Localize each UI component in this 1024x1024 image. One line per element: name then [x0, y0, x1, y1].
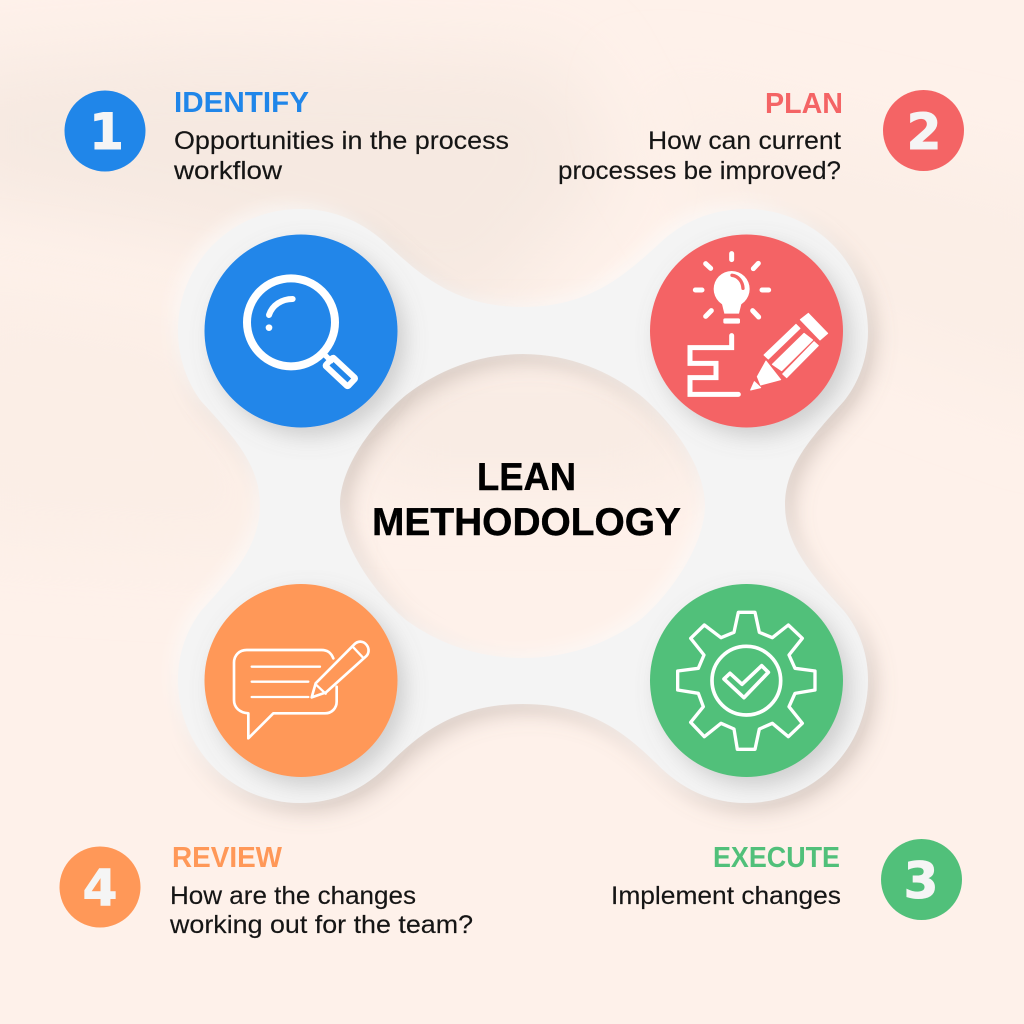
number badge 4: 4 [83, 859, 117, 917]
icon disc: identify magnifier [204, 234, 398, 428]
icon disc: plan bulb, maze and pencil [650, 234, 843, 428]
description review [169, 882, 473, 939]
title: LEAN [477, 456, 576, 499]
step 4: review [60, 842, 473, 939]
heading identify: IDENTIFY [174, 87, 309, 119]
heading review: REVIEW [172, 842, 283, 874]
number badge 2 [883, 90, 964, 171]
central four-lobed panel [178, 209, 868, 803]
description review: working out for the team? [169, 911, 473, 939]
title: METHODOLOGY [372, 501, 681, 544]
icon disc: review chat bubble and pen [204, 584, 398, 777]
step 2: plan [558, 88, 964, 185]
number badge 1 [64, 90, 146, 172]
icon disc: execute gear [650, 584, 843, 777]
step 1: identify [64, 87, 509, 185]
description plan [558, 127, 841, 185]
description review: How are the changes [170, 882, 416, 910]
description identify: Opportunities in the process [174, 127, 509, 155]
number badge 4 [60, 846, 140, 928]
number badge 3: 3 [904, 852, 938, 910]
step 3: execute [611, 839, 962, 920]
description execute: Implement changes [611, 882, 841, 910]
heading execute: EXECUTE [713, 842, 840, 874]
number badge 1: 1 [89, 103, 124, 161]
description identify: workflow [173, 157, 283, 185]
number badge 3 [881, 839, 962, 920]
title [372, 456, 681, 544]
description plan: processes be improved? [558, 157, 841, 185]
description plan: How can current [648, 127, 841, 155]
description identify [173, 127, 509, 185]
number badge 2: 2 [907, 103, 941, 161]
heading plan: PLAN [765, 88, 843, 120]
